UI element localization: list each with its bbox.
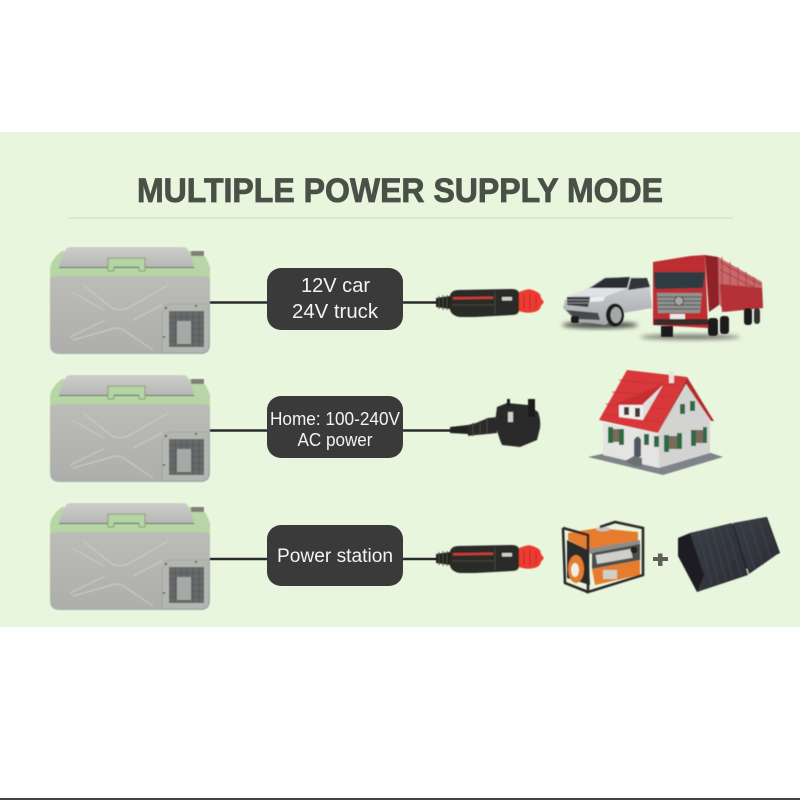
label pill <box>267 268 403 330</box>
cigarette plug <box>436 289 544 317</box>
label pill: AC power <box>298 430 373 450</box>
icon: SUV <box>562 277 652 328</box>
title: MULTIPLE POWER SUPPLY MODE <box>137 172 663 210</box>
icon: generator <box>563 522 643 592</box>
row 3: power station <box>50 503 780 610</box>
label pill <box>267 525 403 586</box>
label pill: 24V truck <box>292 301 379 323</box>
label pill: Power station <box>277 546 393 567</box>
label pill: Home: 100-240V <box>270 409 400 429</box>
cable <box>209 429 470 432</box>
label pill: 12V car <box>301 275 370 297</box>
cable <box>209 301 438 304</box>
plus sign <box>653 554 668 566</box>
icon: folding solar panel <box>678 517 780 592</box>
cable <box>209 558 438 560</box>
background panel <box>0 132 800 627</box>
UK plug <box>450 399 540 447</box>
fridge <box>50 503 210 610</box>
fridge <box>50 247 210 354</box>
cigarette plug <box>436 545 544 573</box>
icon: house <box>588 370 723 475</box>
label pill <box>267 396 403 458</box>
row 1: car and truck power <box>50 247 763 354</box>
bottom edge line <box>0 798 800 800</box>
row 2: home AC power <box>50 370 723 482</box>
icon: red truck <box>640 255 763 340</box>
fridge <box>50 375 210 482</box>
